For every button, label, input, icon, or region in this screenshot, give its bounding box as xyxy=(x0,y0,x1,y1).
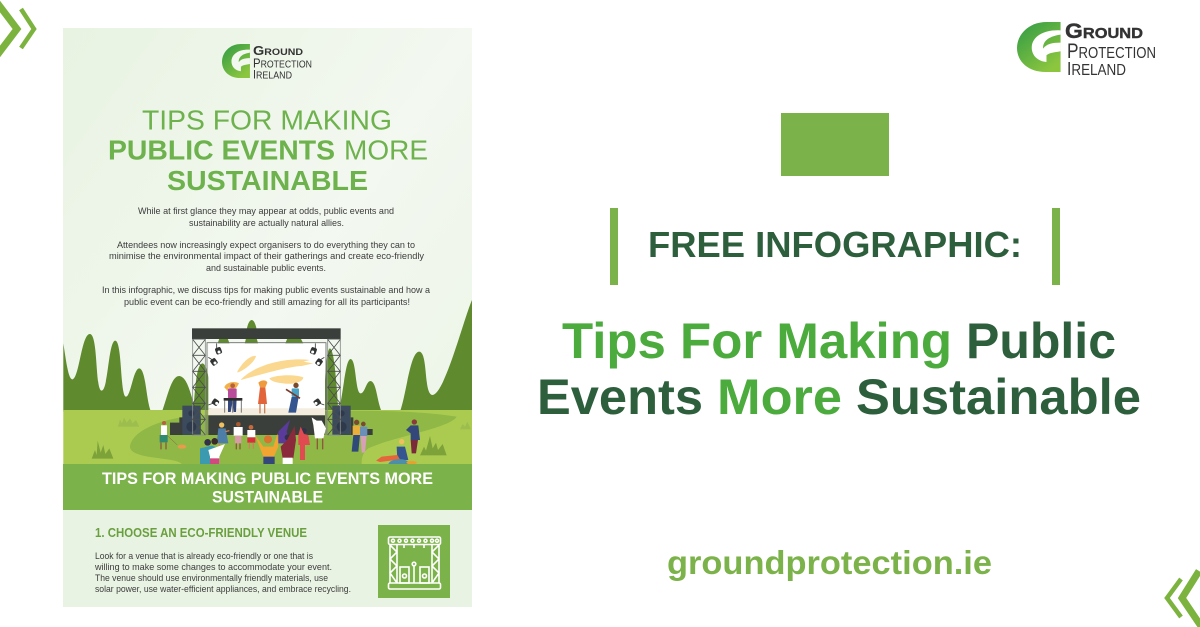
heading: poster title: TIPS FOR MAKING xyxy=(142,104,392,136)
illustration: concert stage in park xyxy=(63,300,472,464)
text: tip 1 body xyxy=(94,551,351,595)
banner: poster subheading: SUSTAINABLE xyxy=(212,488,323,506)
stage floor xyxy=(208,408,325,415)
text: tip 1 body: Look for a venue that is already eco-friendly or one that is xyxy=(95,551,313,562)
text: logo name: PROTECTION xyxy=(1067,40,1156,63)
heading: free infographic: FREE INFOGRAPHIC: xyxy=(648,224,1022,265)
speakers right xyxy=(332,406,373,435)
footpath xyxy=(130,411,457,464)
heading: main title: Events xyxy=(537,369,703,425)
text: logo name: GROUND xyxy=(1065,20,1143,43)
logo: top right xyxy=(1017,20,1156,79)
performer: singer xyxy=(258,380,267,413)
stage roof xyxy=(192,328,341,339)
icon: logo mark xyxy=(1017,22,1061,72)
icon: stage xyxy=(378,525,450,598)
grass tufts xyxy=(92,417,471,459)
text: poster intro: and sustainable public events. xyxy=(206,263,326,274)
heading: poster title: MORE xyxy=(344,134,428,166)
performer: guitarist xyxy=(286,383,300,413)
text: poster logo name xyxy=(254,46,312,78)
stage screen xyxy=(208,343,325,408)
text: poster intro: sustainability are actually natural allies. xyxy=(189,218,344,229)
text: poster intro: While at first glance they may appear at odds, public events and xyxy=(138,206,394,217)
panel: tip 1 xyxy=(63,510,472,607)
heading: poster title: PUBLIC EVENTS xyxy=(108,134,335,166)
heading: main title: Tips For Making xyxy=(562,313,952,369)
banner: poster subheading xyxy=(63,464,472,510)
seated group xyxy=(376,439,417,464)
heading: poster title: SUSTAINABLE xyxy=(167,165,368,196)
heading: main title xyxy=(537,313,1141,425)
text: logo name: IRELAND xyxy=(1067,59,1126,79)
brush strokes xyxy=(237,356,313,384)
text: tip 1 body: willing to make some changes to accommodate your event. xyxy=(94,562,332,573)
text: poster intro: minimise the environmental impact of their gatherings and create eco-friendly xyxy=(109,251,424,262)
text: poster logo name: PROTECTION xyxy=(253,56,312,70)
trusses xyxy=(193,339,340,435)
decorative green block xyxy=(781,113,889,176)
text: poster intro: public event can be eco-friendly and still amazing for all its participants! xyxy=(124,297,410,308)
website address: groundprotection.ie xyxy=(667,544,992,581)
text: tip 1 body: solar power, use water-efficient appliances, and embrace recycling. xyxy=(95,584,351,595)
panel: infographic preview xyxy=(63,28,472,607)
performer: keyboard player xyxy=(224,382,242,413)
icon: poster logo mark xyxy=(222,44,250,78)
text: poster logo name: GROUND xyxy=(253,43,303,58)
heading: tip 1: 1. CHOOSE AN ECO-FRIENDLY VENUE xyxy=(95,526,307,540)
crowd foreground xyxy=(200,426,296,464)
stage platform xyxy=(208,415,325,435)
icon: chevrons top left xyxy=(0,0,34,58)
text: tip 1 body: The venue should use environmentally friendly materials, use xyxy=(95,573,328,584)
banner: poster subheading: TIPS FOR MAKING PUBLIC EVENTS MORE xyxy=(102,470,433,488)
text: poster logo name: IRELAND xyxy=(253,68,292,82)
heading: free infographic xyxy=(610,208,1060,285)
logo: poster xyxy=(222,44,312,78)
text: poster intro xyxy=(102,206,431,308)
text: poster intro: Attendees now increasingly expect organisers to do everything they can to xyxy=(117,240,415,251)
text: logo name xyxy=(1065,20,1156,79)
heading: main title: Sustainable xyxy=(856,369,1141,425)
ground xyxy=(63,410,472,464)
heading: main title: More xyxy=(717,369,842,425)
text: poster intro: In this infographic, we discuss tips for making public events sustainable and how a xyxy=(102,285,431,296)
icon: chevrons bottom right xyxy=(1167,571,1200,627)
spotlights xyxy=(208,343,324,406)
speakers and steps left xyxy=(170,406,201,435)
heading: main title: Public xyxy=(966,313,1116,369)
stage frame xyxy=(207,343,326,435)
dog walker xyxy=(160,421,186,449)
hills xyxy=(63,300,472,412)
crowd xyxy=(217,417,420,460)
heading: poster title xyxy=(110,110,427,190)
